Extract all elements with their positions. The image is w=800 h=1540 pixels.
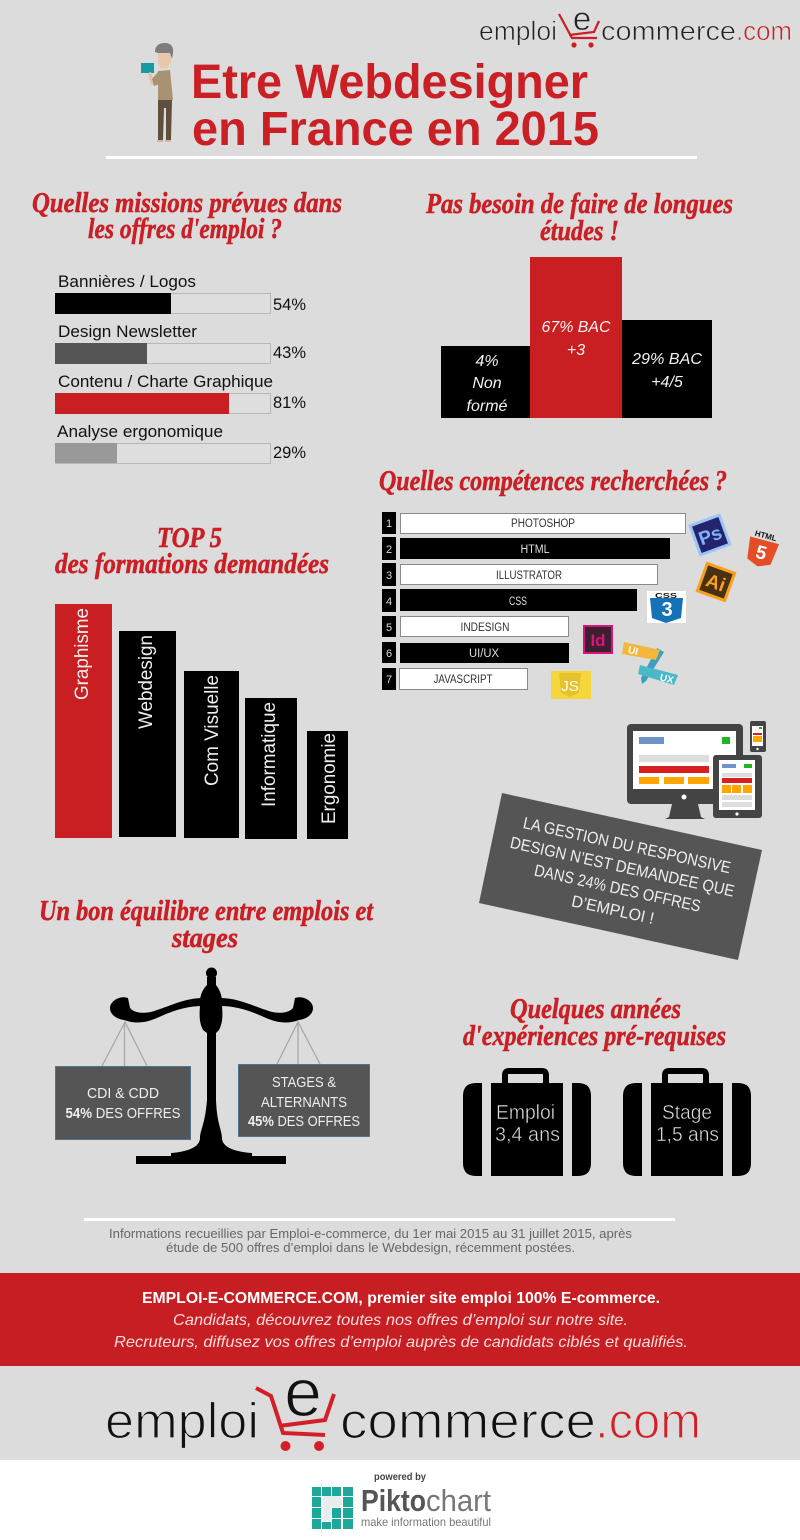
icon: designer character holding tablet <box>141 43 173 142</box>
icon: JavaScript: JS <box>561 678 579 695</box>
title: en France en 2015 <box>192 103 599 156</box>
title: Etre Webdesigner <box>191 56 588 109</box>
icon: scale <box>102 968 320 1164</box>
icon: InDesign: Id <box>590 631 606 650</box>
bar: 4% non formé: Non <box>472 375 502 392</box>
bar: Design Newsletter 43% <box>55 322 306 364</box>
icon: Photoshop: Ps <box>696 523 725 550</box>
heading: top 5 <box>55 523 329 580</box>
logo: emploi e-commerce top <box>479 0 792 48</box>
ranking bars: 7 <box>386 674 392 686</box>
bar: Contenu / Charte Graphique 81%: 81% <box>273 393 306 412</box>
icon: Illustrator <box>695 561 737 603</box>
box: stages et alternants: STAGES & <box>272 1074 336 1091</box>
bar: 67% BAC +3: 67% BAC <box>542 319 611 336</box>
icon: suitcase emploi: 3,4 ans <box>495 1124 560 1146</box>
icon: CSS3 <box>647 591 686 623</box>
icon: Photoshop <box>688 513 732 557</box>
heading: missions <box>32 188 342 245</box>
ranking bars: JAVASCRIPT <box>434 674 492 686</box>
heading: équilibre <box>39 896 374 954</box>
heading: équilibre: stages <box>171 923 238 954</box>
icon: Illustrator: Ai <box>703 570 728 597</box>
bar: 4% non formé: 4% <box>475 353 499 370</box>
panel: missions <box>32 188 342 464</box>
panel: responsive <box>479 721 766 960</box>
panel: top 5 formations <box>55 523 348 839</box>
ranking bars: HTML <box>520 544 550 556</box>
heading: études: Pas besoin de faire de longues <box>425 189 733 220</box>
icon: CSS3: 3 <box>661 599 673 621</box>
logo: emploi e-commerce bottom: commerce <box>340 1393 596 1449</box>
bar: Ergonomie: Ergonomie <box>319 733 340 824</box>
ranking bars: PHOTOSHOP <box>511 518 575 530</box>
logo: emploi e-commerce top: e <box>573 0 591 37</box>
bar: Com Visuelle: Com Visuelle <box>202 675 223 786</box>
bar: 67% BAC +3 <box>530 257 622 418</box>
ranking bars: ILLUSTRATOR <box>496 570 562 582</box>
bar: 29% BAC +4/5 <box>622 320 712 418</box>
icon: JavaScript <box>551 671 591 699</box>
box: stages et alternants: ALTERNANTS <box>261 1094 347 1111</box>
logo: emploi e-commerce bottom <box>105 1355 701 1451</box>
ranking bars <box>382 512 686 690</box>
banner: call to action: Recruteurs, diffusez vos offres d’emploi auprès de candidats ciblés et qualifiés. <box>114 1334 688 1351</box>
logo: powered by Piktochart: Pikto <box>361 1483 426 1518</box>
heading: top 5: TOP 5 <box>157 523 222 554</box>
logo: powered by Piktochart <box>312 1472 491 1529</box>
logo: emploi e-commerce bottom: .com <box>595 1393 701 1449</box>
bar: Com Visuelle <box>184 671 239 838</box>
logo: powered by Piktochart: powered by <box>374 1472 426 1483</box>
logo: emploi e-commerce top: .com <box>736 16 792 46</box>
icon: UI/UX pencil: UI <box>627 645 639 658</box>
bar: 29% BAC +4/5: +4/5 <box>651 374 683 391</box>
logo: powered by Piktochart: chart <box>426 1483 491 1518</box>
icon: suitcase emploi: Emploi <box>496 1102 555 1124</box>
bar: Bannières / Logos 54%: 54% <box>273 295 306 314</box>
heading: études <box>425 189 733 247</box>
callout: responsive design <box>479 793 762 960</box>
banner: call to action: EMPLOI-E-COMMERCE.COM, premier site emploi 100% E-commerce. <box>142 1290 660 1307</box>
box: stages et alternants: 45% DES OFFRES <box>248 1113 360 1130</box>
bar: Webdesign <box>119 631 176 837</box>
ranking bars: 1 <box>386 518 392 530</box>
callout: responsive design: D’EMPLOI ! <box>570 892 656 928</box>
heading: études: études ! <box>540 216 619 247</box>
heading: équilibre: Un bon équilibre entre emplois et <box>39 896 374 927</box>
box: CDI & CDD: 54% DES OFFRES <box>66 1105 180 1122</box>
icon: HTML5: 5 <box>753 542 769 565</box>
ranking bars: 2 <box>386 544 392 556</box>
icon: suitcase emploi <box>463 1071 591 1176</box>
logo: emploi e-commerce top: commerce <box>601 16 736 46</box>
panel: études <box>425 189 733 418</box>
icon: UI/UX pencil <box>622 642 678 687</box>
ranking bars: INDESIGN <box>460 622 510 634</box>
logo: emploi e-commerce bottom: e <box>284 1355 322 1431</box>
bar: 4% non formé <box>441 346 530 418</box>
bar: 67% BAC +3: +3 <box>567 342 585 359</box>
icon: responsive devices <box>627 721 766 819</box>
box: CDI & CDD <box>56 1066 190 1140</box>
bar: Design Newsletter 43%: Design Newsletter <box>58 322 197 341</box>
bar: Graphisme <box>55 604 112 838</box>
bar: Webdesign: Webdesign <box>136 635 157 729</box>
bar: Informatique: Informatique <box>259 702 280 807</box>
icon: suitcase stage <box>623 1071 751 1176</box>
ranking bars: 3 <box>386 570 392 582</box>
bar: Graphisme: Graphisme <box>72 608 93 700</box>
banner: call to action: Candidats, découvrez toutes nos offres d’emploi sur notre site. <box>173 1312 628 1329</box>
bar: 4% non formé: formé <box>467 398 508 415</box>
ranking bars: 4 <box>386 596 392 608</box>
icon: suitcase stage: 1,5 ans <box>656 1124 719 1146</box>
panel: compétences <box>379 466 781 699</box>
panel: expérience <box>463 994 751 1176</box>
source note <box>109 1227 632 1255</box>
bar: Analyse ergonomique 29%: 29% <box>273 443 306 462</box>
heading: missions: Quelles missions prévues dans <box>32 188 342 219</box>
box: stages et alternants <box>238 1064 370 1136</box>
logo: emploi e-commerce top: emploi <box>479 16 557 46</box>
callout: responsive design: DESIGN N’EST DEMANDEE QUE <box>508 834 736 901</box>
heading: top 5: des formations demandées <box>55 549 329 580</box>
bar: Bannières / Logos 54%: Bannières / Logos <box>58 272 196 291</box>
panel: emplois et stages <box>39 896 374 1164</box>
heading: missions: les offres d'emploi ? <box>88 214 282 245</box>
title <box>191 56 599 156</box>
icon: suitcase stage: Stage <box>662 1102 712 1124</box>
source note: étude de 500 offres d’emploi dans le Webdesign, récemment postées. <box>166 1241 575 1255</box>
bar: Bannières / Logos 54% <box>55 272 306 314</box>
heading: expérience <box>463 994 726 1052</box>
callout: responsive design: DANS 24% DES OFFRES <box>532 862 702 916</box>
icon: HTML5 <box>743 528 781 570</box>
bar: Contenu / Charte Graphique 81% <box>55 372 306 414</box>
heading: compétences: Quelles compétences recherchées ? <box>379 466 727 497</box>
heading: expérience: Quelques années <box>510 994 681 1025</box>
logo: powered by Piktochart: make information beautiful <box>361 1515 491 1529</box>
source note: Informations recueillies par Emploi-e-commerce, du 1er mai 2015 au 31 juillet 2015, après <box>109 1227 632 1241</box>
bar: Ergonomie <box>307 731 348 839</box>
logo: emploi e-commerce bottom: emploi <box>105 1393 259 1449</box>
icon: UI/UX pencil: UX <box>659 672 675 687</box>
icon: CSS3: CSS <box>655 593 677 600</box>
callout: responsive design: LA GESTION DU RESPONSIVE <box>521 814 732 877</box>
bar: Analyse ergonomique 29%: Analyse ergonomique <box>57 422 223 441</box>
bar: Informatique <box>245 698 297 839</box>
ranking bars: CSS <box>509 596 527 608</box>
icon: HTML5: HTML <box>754 529 778 543</box>
ranking bars: UI/UX <box>469 648 499 660</box>
bar: 29% BAC +4/5: 29% BAC <box>631 351 702 368</box>
bar: Design Newsletter 43%: 43% <box>273 343 306 362</box>
icon: InDesign <box>583 625 613 654</box>
ranking bars: 6 <box>386 648 392 660</box>
bar: Analyse ergonomique 29% <box>55 422 306 464</box>
bar: Contenu / Charte Graphique 81%: Contenu / Charte Graphique <box>58 372 273 391</box>
ranking bars: 5 <box>386 622 392 634</box>
heading: expérience: d'expériences pré-requises <box>463 1021 726 1052</box>
banner: call to action <box>0 1273 800 1366</box>
box: CDI & CDD: CDI & CDD <box>87 1085 159 1102</box>
